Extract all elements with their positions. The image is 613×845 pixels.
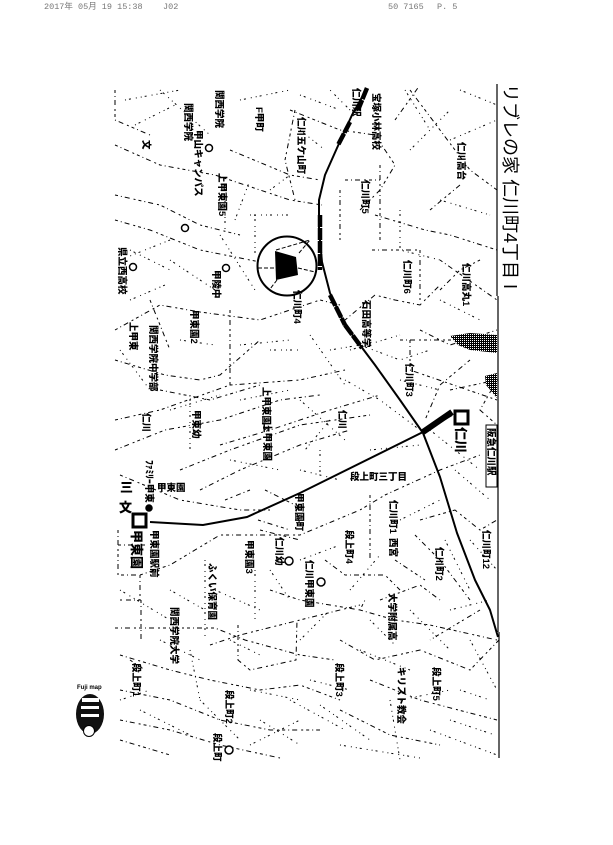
map labels: south: 仁川町12 — [480, 530, 492, 569]
map labels: south: 段上町 — [211, 733, 223, 762]
fax header: J02 — [163, 2, 178, 12]
map labels: north: 上甲東園3 — [260, 387, 272, 430]
map labels: north: 県立西高校 — [116, 247, 128, 295]
map labels: north: 甲山キャンパス — [192, 130, 203, 197]
map labels: south: 仁川甲東園 — [303, 560, 315, 608]
railway line — [150, 415, 452, 525]
map labels: north: 仁川駅 — [350, 88, 362, 117]
fax header: 2017年 05月 19 15:38 — [44, 1, 143, 12]
map labels: south: 仁川幼 — [273, 537, 285, 566]
map labels: south: 段上町三丁目 — [350, 471, 407, 483]
map labels: north: 甲東園2 — [188, 310, 200, 344]
title: リブレの家 仁川町4丁目 I — [500, 84, 521, 289]
map labels: north: 仁川町4 — [291, 290, 303, 325]
map labels: south: 甲東園駅前 — [148, 530, 160, 578]
map labels: north — [116, 88, 472, 430]
map labels: north: 関西学院 — [182, 103, 194, 142]
map labels: north: 宝塚小林高校 — [370, 93, 382, 151]
map labels: south: 段上町4 — [343, 530, 355, 565]
logo — [76, 685, 104, 736]
station block — [423, 412, 452, 432]
fax header — [44, 1, 457, 12]
map: minor streets — [115, 85, 499, 758]
map labels: south: 段上町2 — [223, 690, 235, 724]
map labels: north: 仁川町6 — [401, 260, 413, 294]
map labels: north: 上甲東 — [127, 322, 139, 351]
boxed label: station name: 阪急仁川駅 — [485, 428, 497, 476]
map labels: north: F甲町 — [253, 107, 264, 132]
site locator: circle and building — [258, 236, 316, 296]
map labels: south: ﾌｧﾐﾘｰ甲東 — [143, 460, 155, 503]
logo: Fuji map — [77, 685, 102, 691]
map: scattered lanes — [120, 90, 497, 770]
map labels: south: 段上町3 — [333, 663, 345, 697]
map labels: south: 仁川 — [140, 413, 152, 432]
map labels: south: 甲東園 — [157, 482, 186, 494]
map labels: south: 関西学院大学 — [168, 607, 180, 665]
main road — [319, 92, 498, 637]
road: heavy dithered segments — [320, 88, 367, 348]
map labels: north: 甲陵中 — [210, 270, 222, 299]
map labels: south: 三 — [120, 480, 133, 495]
map labels: south: 甲東園町 — [293, 493, 305, 532]
map labels: north: 仁川町5 — [359, 180, 371, 215]
map labels: north: 上甲東園5 — [216, 173, 228, 217]
station label: Nigawa — [453, 411, 468, 453]
station label: Nigawa: 仁川 — [453, 427, 468, 453]
map labels: south: 仁川町1 — [387, 500, 399, 535]
map labels: south: 段上町1 — [130, 663, 142, 698]
map labels: south: 仁川町2 — [433, 547, 445, 581]
map labels: north: 仁川高台 — [455, 142, 467, 181]
map labels: south: 甲東園3 — [243, 540, 255, 574]
map labels: south: 甲東幼 — [190, 410, 202, 439]
station label: Kotoen — [129, 514, 146, 569]
map labels: north: 石田高等学 — [360, 300, 372, 348]
park: dithered area — [450, 333, 497, 398]
map labels: north: 文 — [140, 140, 152, 150]
map labels: south: 上甲東園 — [261, 423, 273, 461]
map labels: south: キリスト教会 — [395, 667, 407, 725]
school symbols — [130, 144, 325, 754]
station label: Kotoen: 甲東園 — [129, 530, 144, 569]
map labels: south: 段上町5 — [430, 667, 442, 702]
map labels: north: 関西学院中学部 — [147, 325, 159, 392]
map labels: south — [119, 410, 492, 762]
map labels: south: 西宮 — [387, 538, 399, 557]
map labels: north: 仁川五ケ山町 — [295, 117, 307, 175]
map labels: south: 文 — [119, 500, 132, 515]
fax header: P. 5 — [437, 2, 457, 12]
map labels: south: 大学附属高 — [386, 593, 398, 641]
map labels: south: 仁川 — [336, 410, 348, 429]
map labels: south: ふくい保育園 — [206, 563, 218, 620]
map labels: north: 仁川町3 — [403, 363, 415, 397]
fax header: 50 7165 — [388, 2, 424, 12]
map frame line — [497, 84, 499, 758]
map labels: north: 仁川高丸1 — [460, 263, 472, 307]
map labels: north: 関西学院 — [213, 90, 225, 129]
